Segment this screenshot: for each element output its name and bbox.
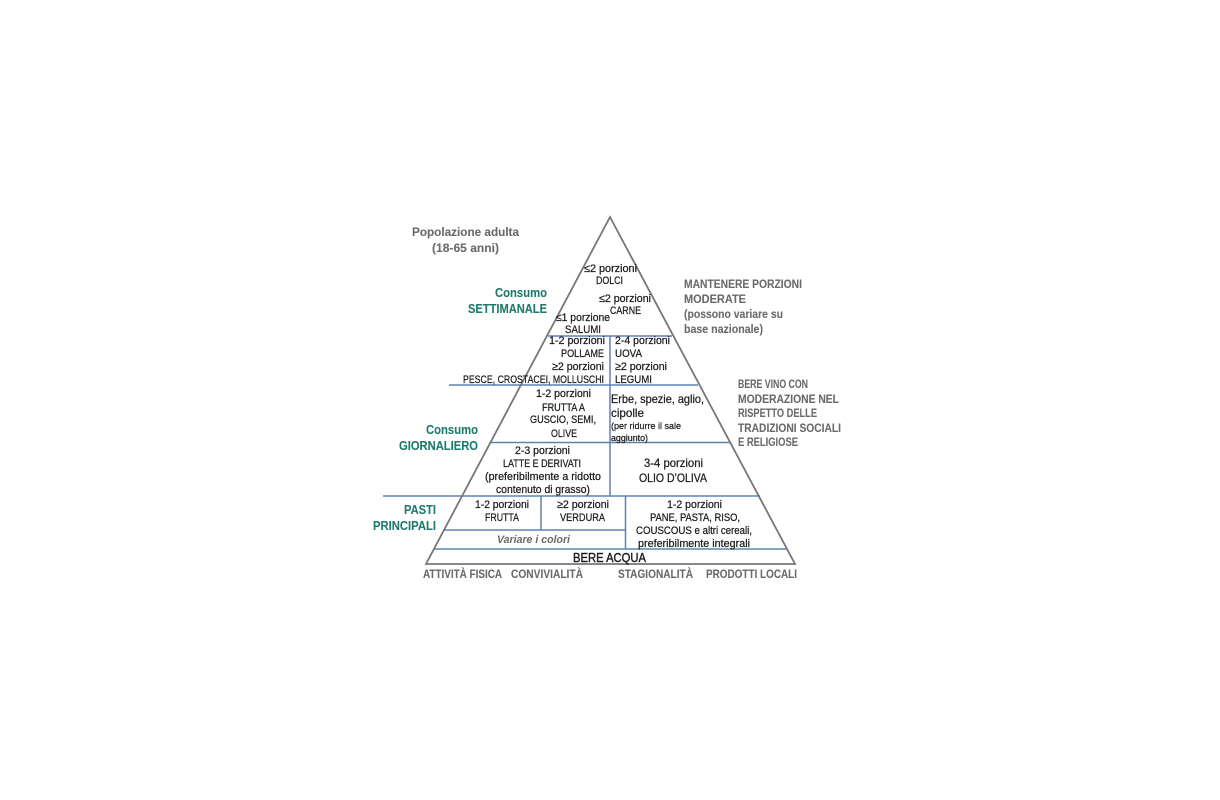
tier: dairy: [485, 445, 601, 496]
note: moderate portions: base nazionale): [684, 322, 763, 336]
tier: olive oil: 3-4 porzioni: [644, 456, 703, 470]
tier: cereals: COUSCOUS e altri cereali,: [636, 525, 752, 537]
pyramid dividers: [383, 336, 786, 549]
tier: herbs and spices: [611, 392, 704, 444]
note: wine in moderation: BERE VINO CON: [738, 377, 808, 391]
tier: dairy: LATTE E DERIVATI: [503, 458, 581, 470]
label: daily consumption: GIORNALIERO: [399, 439, 478, 453]
tier: dairy: 2-3 porzioni: [515, 445, 570, 457]
tier: vegetables: [557, 499, 609, 524]
tier: nuts, seeds, olives: OLIVE: [551, 428, 577, 440]
heading: target population: Popolazione adulta: [412, 225, 519, 239]
tier: cereals: preferibilmente integrali: [638, 538, 750, 550]
tier: cured meats: [556, 312, 610, 336]
tier: sweets: DOLCI: [596, 275, 623, 287]
tier: nuts, seeds, olives: FRUTTA A: [542, 402, 586, 414]
note: wine in moderation: MODERAZIONE NEL: [738, 392, 839, 406]
tier: eggs and legumes: 2-4 porzioni: [615, 335, 670, 347]
tier: poultry and fish: PESCE, CROSTACEI, MOLLUSCHI: [463, 374, 604, 386]
tier: poultry and fish: ≥2 porzioni: [552, 361, 604, 373]
tier: herbs and spices: aggiunto): [611, 433, 648, 444]
label: main meals: PRINCIPALI: [373, 519, 436, 533]
label: daily consumption: Consumo: [426, 423, 478, 437]
tier: eggs and legumes: UOVA: [615, 348, 643, 360]
heading: target population: [412, 225, 519, 255]
tier: herbs and spices: (per ridurre il sale: [611, 421, 681, 432]
tier: nuts, seeds, olives: [530, 388, 596, 440]
label: weekly consumption: Consumo: [495, 286, 547, 300]
tier: vary the colours: Variare i colori: [497, 534, 571, 546]
label: daily consumption: [399, 423, 478, 453]
note: moderate portions: [684, 277, 802, 336]
tier: eggs and legumes: ≥2 porzioni: [615, 361, 667, 373]
tier: nuts, seeds, olives: GUSCIO, SEMI,: [530, 414, 596, 426]
tier: eggs and legumes: [615, 335, 670, 386]
tier: herbs and spices: cipolle: [611, 406, 644, 420]
tier: fruit: [475, 499, 529, 524]
tier: cereals: PANE, PASTA, RISO,: [650, 512, 740, 524]
label: main meals: [373, 503, 436, 533]
tier: cured meats: SALUMI: [565, 324, 601, 336]
heading: target population: (18-65 anni): [432, 241, 499, 255]
tier: herbs and spices: Erbe, spezie, aglio,: [611, 392, 704, 406]
base labels: lifestyle: [423, 566, 797, 581]
tier: water: BERE ACQUA: [573, 551, 647, 565]
tier: fruit: 1-2 porzioni: [475, 499, 529, 511]
tier: poultry and fish: 1-2 porzioni: [549, 335, 605, 347]
base labels: lifestyle: PRODOTTI LOCALI: [706, 567, 797, 581]
pyramid diagram: [373, 217, 841, 581]
tier: meat: [599, 293, 651, 317]
tier: eggs and legumes: LEGUMI: [615, 374, 652, 386]
tier: fruit: FRUTTA: [485, 512, 520, 524]
note: wine in moderation: TRADIZIONI SOCIALI: [738, 421, 841, 435]
tier: cured meats: ≤1 porzione: [556, 312, 610, 324]
note: moderate portions: MODERATE: [684, 292, 746, 306]
tier: poultry and fish: POLLAME: [561, 348, 604, 360]
base labels: lifestyle: STAGIONALITÀ: [618, 566, 693, 581]
note: moderate portions: (possono variare su: [684, 307, 783, 321]
note: wine in moderation: [738, 377, 841, 449]
tier: vegetables: VERDURA: [560, 512, 606, 524]
note: moderate portions: MANTENERE PORZIONI: [684, 277, 802, 291]
tier: meat: CARNE: [610, 305, 641, 317]
tier: nuts, seeds, olives: 1-2 porzioni: [536, 388, 591, 400]
label: weekly consumption: SETTIMANALE: [468, 302, 547, 316]
tier: sweets: [584, 263, 637, 287]
base labels: lifestyle: ATTIVITÀ FISICA: [423, 566, 502, 581]
tier: vegetables: ≥2 porzioni: [557, 499, 609, 511]
note: wine in moderation: E RELIGIOSE: [738, 435, 798, 449]
tier: meat: ≤2 porzioni: [599, 293, 651, 305]
note: wine in moderation: RISPETTO DELLE: [738, 406, 817, 420]
tier: olive oil: [639, 456, 707, 485]
tier: dairy: (preferibilmente a ridotto: [485, 471, 601, 483]
tier: dairy: contenuto di grasso): [496, 484, 590, 496]
base labels: lifestyle: CONVIVIALITÀ: [511, 566, 583, 581]
label: weekly consumption: [468, 286, 547, 316]
tier: cereals: [636, 499, 752, 550]
label: main meals: PASTI: [404, 503, 436, 517]
tier: cereals: 1-2 porzioni: [667, 499, 722, 511]
tier: poultry and fish: [463, 335, 605, 386]
tier: olive oil: OLIO D’OLIVA: [639, 471, 707, 485]
pyramid outline: [426, 217, 795, 564]
tier: sweets: ≤2 porzioni: [584, 263, 637, 275]
